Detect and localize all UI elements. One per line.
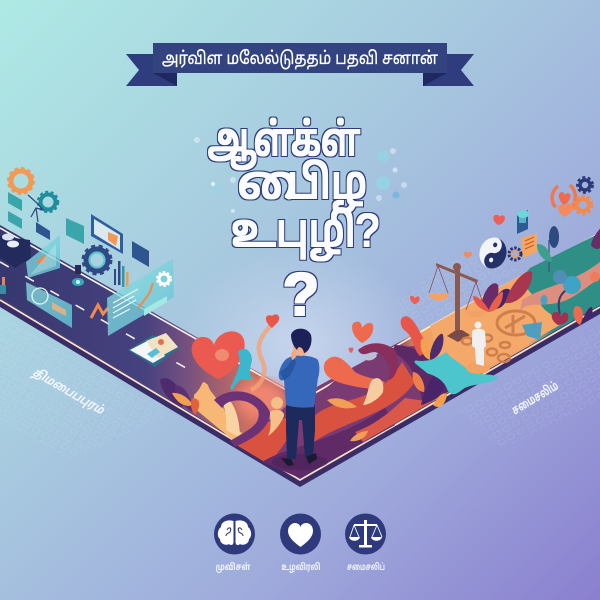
red heart: [192, 331, 245, 379]
orange leaf upper: [327, 398, 357, 408]
title: [208, 114, 379, 328]
flowchart: [8, 192, 50, 240]
lower left red corner: [233, 418, 291, 464]
purple swirl arch: [214, 391, 270, 447]
banner text: அர்விள மலேல்டுததம் பதவி சனான்: [162, 48, 438, 70]
teal card: [66, 218, 84, 244]
road side thickness: [0, 298, 600, 487]
orange bars on road: [0, 277, 6, 294]
monitor: [91, 214, 123, 254]
trousers: [286, 405, 315, 459]
small glass panel: [26, 235, 60, 278]
banner: [126, 43, 474, 86]
left road label: திமபைபபுரம்: [29, 365, 108, 419]
small cream figure: [268, 397, 284, 436]
road surface: [0, 225, 600, 478]
floating bubbles: [194, 137, 407, 213]
open book: [128, 333, 180, 367]
node on road: [72, 265, 84, 286]
right leaves center: [413, 365, 448, 407]
salmon path: [520, 262, 600, 312]
white figure: [472, 322, 486, 366]
bar chart: [114, 261, 128, 289]
icon labels: [216, 562, 385, 574]
teal gear: [38, 192, 58, 212]
navy gear: [83, 246, 111, 274]
yin yang: [476, 234, 510, 272]
title: ை: [237, 157, 311, 208]
road dashes: [0, 262, 200, 376]
person: [272, 329, 328, 470]
title: ஆள்க்ள்: [208, 114, 360, 170]
left leaning flame: [401, 316, 427, 356]
bottom icons: [214, 514, 386, 574]
cyan figure: [230, 349, 254, 390]
red ribbon: [324, 357, 385, 390]
lower glass panel: [26, 282, 72, 328]
center illustration: [160, 314, 455, 478]
title: பிழ: [287, 157, 367, 213]
orange document: [521, 233, 537, 258]
left road panels: [0, 234, 180, 367]
icon labels: உழவிரலி: [282, 562, 320, 573]
triangle marker: [522, 322, 542, 340]
shirt: [279, 355, 319, 408]
title: ?: [283, 261, 319, 328]
pink floor glow: [236, 380, 288, 420]
road: [0, 225, 600, 487]
left flames: [194, 382, 255, 446]
navy card: [132, 241, 149, 267]
dark swirl arc: [392, 345, 455, 405]
navy gear right: [578, 178, 592, 192]
orange heart: [558, 204, 573, 217]
orange floor: [430, 270, 565, 390]
orange gear right: [574, 196, 592, 214]
shoes: [281, 458, 294, 466]
green path: [520, 233, 600, 325]
icon: heart: [280, 514, 321, 554]
orange zigzag: [91, 305, 108, 318]
floating red hearts: [410, 215, 505, 304]
navy small gear: [509, 248, 521, 260]
cream figure: [363, 378, 383, 405]
left tech icons: [8, 168, 149, 289]
red plant: [552, 312, 568, 325]
ribbon flame with heart: [251, 314, 279, 390]
server on road: [0, 234, 31, 268]
title: உபுழி?: [231, 205, 379, 261]
leaf cluster: [473, 271, 532, 312]
big glass panel: [107, 259, 174, 336]
lower right salmon edge: [355, 398, 432, 442]
cyan water: [416, 354, 496, 393]
leaves right: [573, 228, 600, 325]
road edge lines: [0, 228, 288, 391]
small figure on path: [540, 295, 548, 305]
icon: scales: [345, 514, 386, 554]
orange gear: [8, 168, 34, 194]
tree right: [537, 226, 581, 314]
orange leaves on road: [421, 334, 443, 360]
right hearts: [352, 322, 373, 343]
shadow: [272, 454, 328, 470]
scale: [428, 263, 486, 342]
ring icon: [552, 185, 575, 208]
rings on road: [462, 334, 510, 362]
phone: [517, 210, 529, 234]
banner left tail: [126, 54, 177, 86]
right road label: சமைசலிம்: [509, 378, 561, 417]
icon labels: முவிசள்: [216, 562, 250, 574]
icon: brain: [214, 514, 255, 554]
banner right tail: [423, 54, 474, 86]
left leaves: [160, 378, 199, 415]
justice and society: [401, 178, 600, 393]
orange leaf lower: [350, 431, 368, 441]
apex dark band: [262, 408, 395, 478]
swirl base: [240, 345, 455, 478]
red orange band: [314, 362, 415, 442]
wheel emblem: [497, 311, 535, 335]
figure pedestal: [466, 362, 490, 374]
icon labels: சமைசலிப்: [347, 562, 385, 573]
head: [293, 338, 309, 356]
